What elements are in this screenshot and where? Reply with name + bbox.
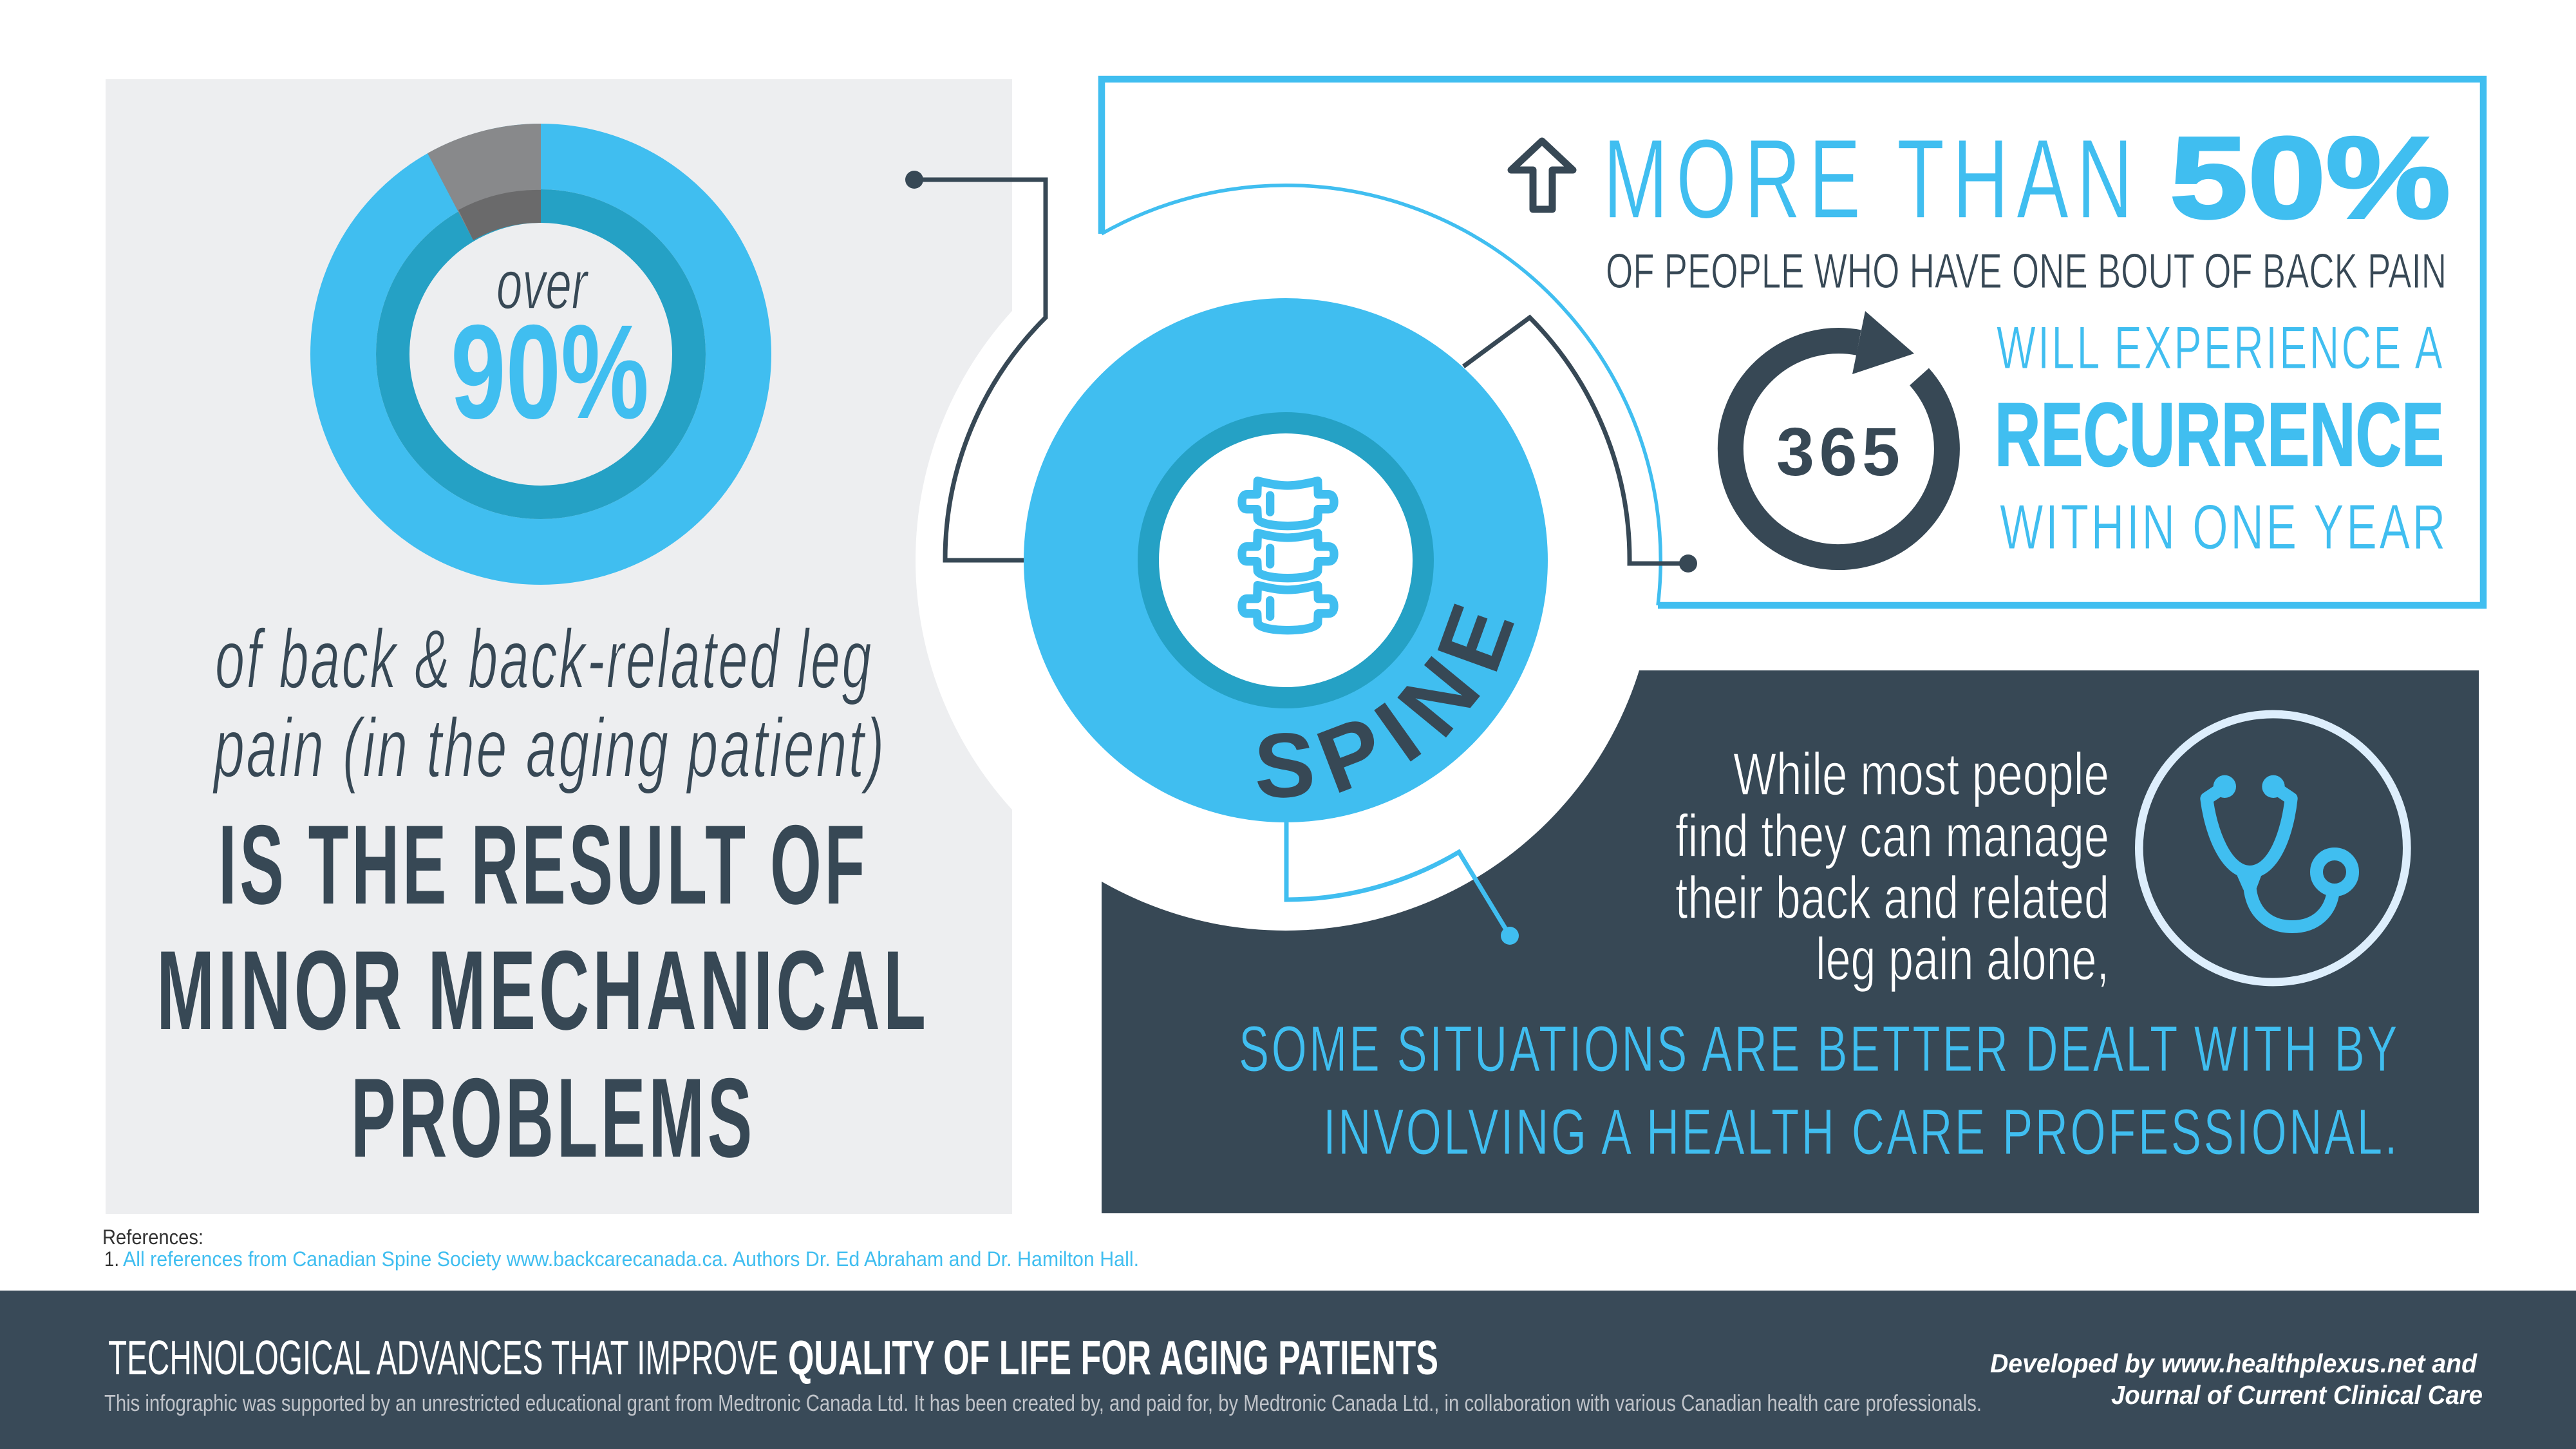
footer credit — [1990, 1349, 2483, 1410]
panel: dark care panel background — [1102, 670, 2479, 1213]
icon: up arrow — [1511, 141, 1573, 209]
footer disclosure: This infographic was supported by an unrestricted educational grant from Medtronic Canada Ltd. It has been created by, and paid for, by Medtronic Canada Ltd., in collaboration with various Canadian health care professionals. — [104, 1390, 1982, 1416]
connector: left dark line — [905, 171, 1046, 560]
text: while most people manage alone: While most people — [1733, 741, 2109, 808]
icon: 365 cycle arrow: 365 — [1776, 414, 1900, 490]
text: while most people manage alone: their back and related — [1675, 864, 2109, 931]
heading: minor mechanical problems: MINOR MECHANICAL — [156, 928, 929, 1054]
heading: minor mechanical problems: PROBLEMS — [351, 1056, 755, 1181]
footer title: TECHNOLOGICAL ADVANCES THAT IMPROVE — [108, 1331, 778, 1385]
heading: more than 50%: MORE THAN — [1603, 117, 2141, 242]
icon: stethoscope in circle — [2139, 714, 2407, 982]
connector: right dark line — [1463, 317, 1697, 573]
footer band — [0, 1291, 2576, 1449]
donut label: over: over — [496, 245, 589, 323]
panel: left grey background — [106, 79, 1012, 1214]
references: All references from Canadian Spine Society www.backcarecanada.ca. Authors Dr. Ed Abraham and Dr. Hamilton Hall. — [123, 1247, 1139, 1271]
curved label: SPINE: SPINE — [1257, 603, 1514, 798]
footer title: QUALITY OF LIFE FOR AGING PATIENTS — [788, 1331, 1438, 1385]
text: while most people manage alone — [1675, 741, 2109, 992]
text: will experience a recurrence within one year — [1995, 314, 2448, 562]
references — [102, 1226, 1139, 1271]
text block: back pain description: pain (in the aging patient) — [212, 701, 886, 795]
heading: minor mechanical problems: IS THE RESULT OF — [218, 802, 868, 928]
spine disc — [1024, 298, 1548, 822]
panel: top right recurrence frame — [1102, 79, 2483, 605]
text block: back pain description — [212, 612, 886, 795]
icon: 365 cycle arrow — [1731, 311, 1947, 557]
references: References: — [102, 1226, 203, 1249]
text: some situations better dealt with professional — [1239, 1013, 2400, 1168]
donut label: 90%: 90% — [451, 298, 649, 447]
donut chart: over 90% — [343, 124, 738, 552]
heading: more than 50%: 50% — [2170, 113, 2450, 243]
references: 1. — [104, 1247, 119, 1271]
heading: minor mechanical problems — [156, 802, 929, 1181]
connector: bottom blue line — [1286, 822, 1519, 945]
text: while most people manage alone: leg pain alone, — [1816, 925, 2109, 992]
white circle behind spine — [916, 190, 1656, 931]
text block: back pain description: of back & back-related leg — [215, 612, 873, 706]
footer credit: Developed by www.healthplexus.net and — [1990, 1349, 2477, 1378]
text: while most people manage alone: find they can manage — [1675, 802, 2109, 869]
icon: spine vertebrae — [1242, 481, 1334, 630]
footer credit: Journal of Current Clinical Care — [2111, 1380, 2483, 1410]
